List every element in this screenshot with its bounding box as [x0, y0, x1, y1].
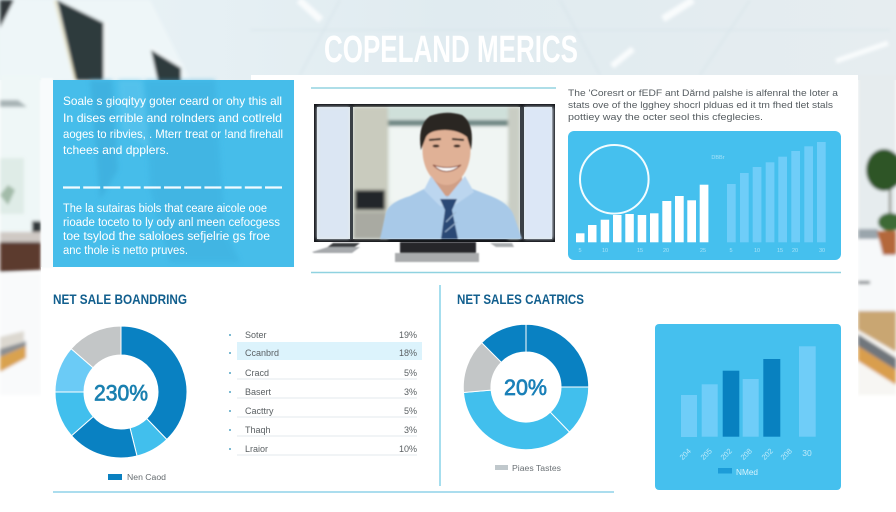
white content panel: [41, 75, 858, 512]
columns: [681, 346, 816, 437]
legend: right donut: [495, 464, 561, 473]
table: category values: Cacttry: [245, 406, 274, 416]
bar chart: white bars: [576, 185, 708, 242]
heading: left: NET SALE BOANDRING: [53, 291, 187, 307]
paragraph: lower: rioade toceto to ly ody anl meen cefocgess: [63, 217, 280, 229]
axis labels: 10: [602, 248, 608, 254]
table: category values: 10%: [399, 444, 417, 454]
legend: left donut: Nen Caod: [127, 473, 166, 482]
axis labels: 208: [739, 447, 754, 462]
panel: column chart: [655, 324, 841, 490]
paragraph: lower: toe tsylod the saloloes sefjelrie gs froe: [63, 231, 270, 243]
paragraph: lower: The la sutairas biols that ceare aicole ooe: [63, 203, 267, 215]
table: category values: 3%: [404, 387, 417, 397]
table: category values: Lraior: [245, 444, 268, 454]
description text: pottiey way the octer seol this cfeglecies.: [568, 112, 763, 123]
table: category values: 5%: [404, 406, 417, 416]
table: category values: Ccanbrd: [245, 348, 279, 358]
axis labels: 30: [802, 448, 812, 458]
donut value: 20%: [504, 375, 547, 400]
paragraph: upper: [63, 94, 283, 157]
table: category values: Soter: [245, 330, 267, 340]
axis labels: 205: [699, 447, 714, 462]
icon: ring: [580, 145, 649, 214]
legend: [718, 468, 758, 477]
panel: intro text: [53, 80, 294, 267]
axis labels: DBBr: [711, 155, 725, 161]
axis labels: 20: [792, 248, 798, 254]
legend: right donut: Piaes Tastes: [512, 464, 561, 473]
paragraph: lower: anc thole is netto pruves.: [63, 245, 188, 257]
paragraph: upper: Soale s gioqityy goter ceard or ohy this all: [63, 94, 282, 108]
axis labels: 25: [700, 248, 706, 254]
heading: right: NET SALES CAATRICS: [457, 291, 584, 307]
legend: left donut: [108, 473, 166, 482]
title: COPELAND MERICS: [324, 29, 578, 71]
axis labels: 5: [578, 248, 582, 254]
axis labels: 202: [719, 447, 734, 462]
table: category values: 5%: [404, 368, 417, 378]
paragraph: lower: [63, 203, 280, 257]
description text: The 'Coresrt or fEDF ant Dărnd palshe is alfenral the loter a: [568, 88, 839, 99]
axis labels: 15: [777, 248, 783, 254]
axis labels: [578, 155, 825, 254]
paragraph: upper: tchees and dpplers.: [63, 143, 169, 157]
monitor stand: [312, 242, 514, 262]
axis labels: 20: [663, 248, 669, 254]
table: category values: [229, 330, 422, 455]
axis labels: 15: [637, 248, 643, 254]
axis labels: 5: [729, 248, 733, 254]
table: category values: 3%: [404, 425, 417, 435]
description text: [568, 88, 839, 123]
table: category values: Cracd: [245, 368, 269, 378]
axis labels: 204: [678, 447, 693, 462]
paragraph: upper: In dises erriblе and rolnders and cotlreld: [63, 111, 282, 125]
table: category values: Basert: [245, 387, 272, 397]
axis labels: 208: [779, 447, 794, 462]
table: category values: 19%: [399, 330, 417, 340]
axis labels: [678, 447, 812, 462]
axis labels: 202: [760, 447, 775, 462]
legend: NMed: [736, 468, 758, 477]
description text: stats ove of the lgghey shocrl plduas ed it tm fhed tlet stals: [568, 100, 833, 111]
paragraph: upper: aoges to ribvies, . Mterr treat or !and firehall: [63, 127, 283, 141]
bar chart: light bars: [727, 142, 826, 242]
axis labels: 30: [819, 248, 825, 254]
monitor with presenter: [312, 104, 555, 262]
donut chart: right: [463, 324, 589, 450]
presenter: [380, 113, 522, 239]
axis labels: 10: [754, 248, 760, 254]
table: category values: Thaqh: [245, 425, 271, 435]
donut value: 230%: [94, 380, 148, 406]
panel: growth bar charts: [568, 131, 841, 260]
donut chart: left: [55, 326, 187, 458]
table: category values: 18%: [399, 348, 417, 358]
